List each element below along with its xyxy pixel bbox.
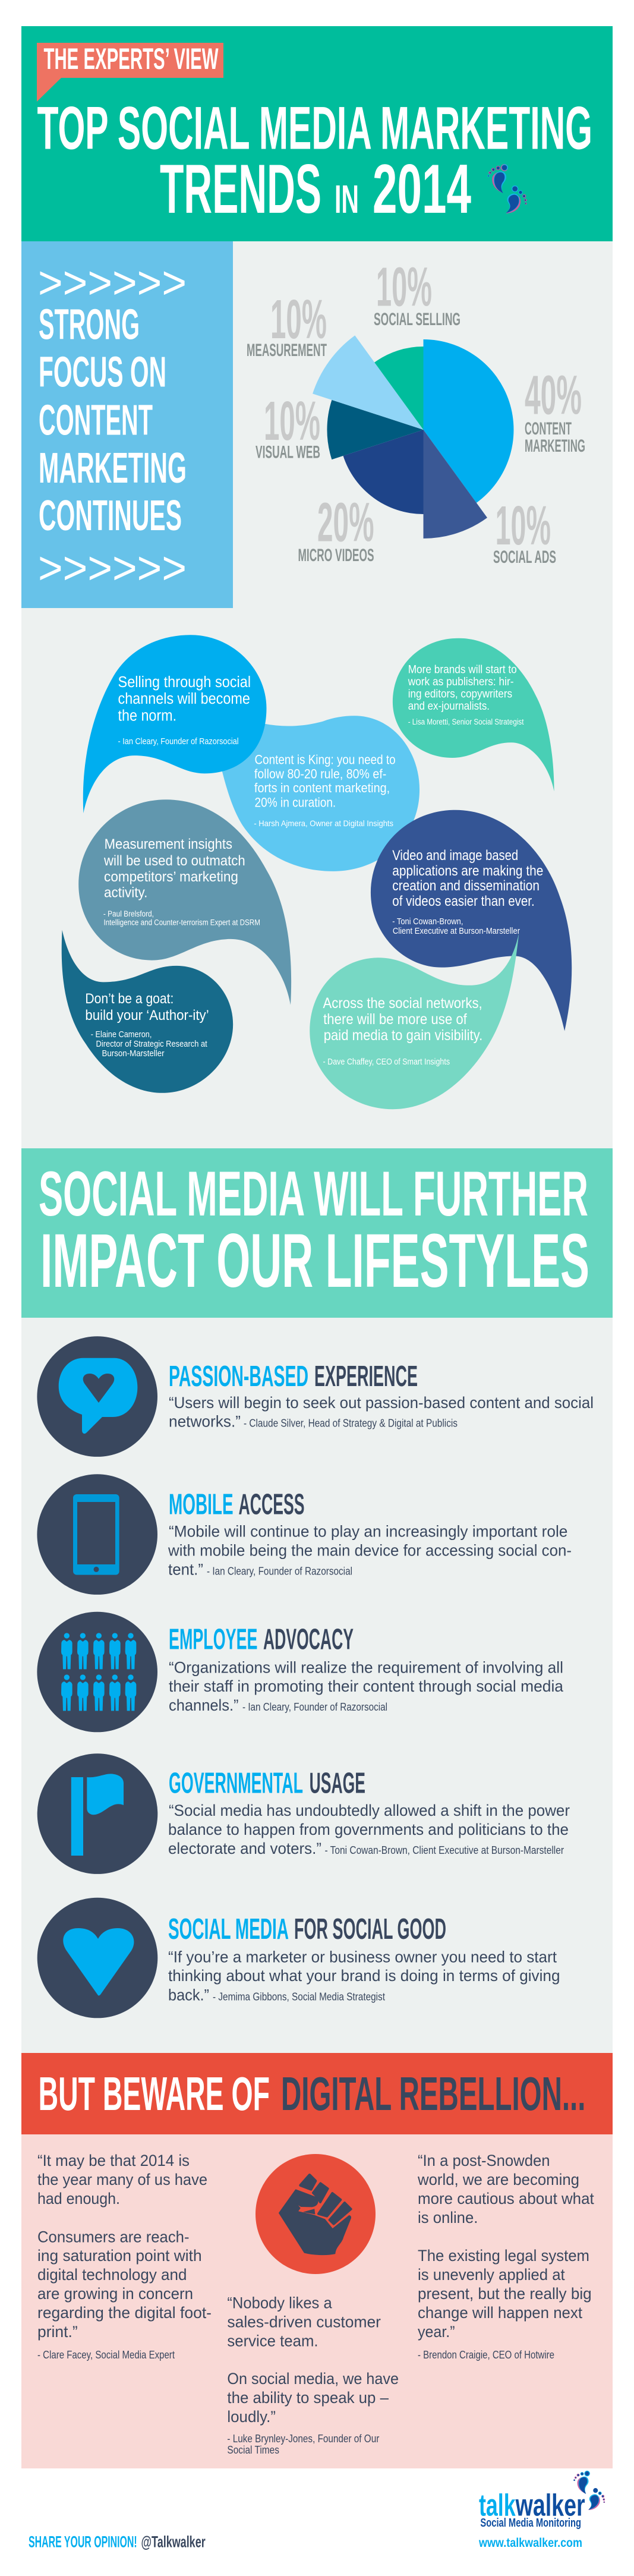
bubble: content is king: Content is King: you need to bbox=[255, 752, 396, 767]
bubble: selling through social: - Ian Cleary, Founder of Razorsocial bbox=[118, 736, 239, 747]
item: employee advocacy: EMPLOYEE bbox=[169, 1624, 258, 1656]
chart labels: SOCIAL ADS bbox=[493, 547, 556, 567]
bubble: video and image: of videos easier than ever. bbox=[392, 894, 535, 909]
chart labels: VISUAL WEB bbox=[256, 443, 320, 462]
bubble: selling through social: the norm. bbox=[118, 706, 176, 724]
icon: speech bubble heart bbox=[37, 1336, 157, 1457]
quote: clare facey: regarding the digital foot- bbox=[37, 2304, 212, 2322]
bubble: more brands: ing editors, copywriters bbox=[408, 688, 512, 700]
pie chart bbox=[313, 335, 513, 538]
quote: clare facey: Consumers are reach- bbox=[37, 2228, 189, 2246]
item: passion-based experience: EXPERIENCE bbox=[314, 1361, 418, 1393]
title bbox=[37, 95, 592, 228]
chart labels bbox=[247, 256, 585, 567]
panel: strong focus on content marketing: CONTENT bbox=[39, 397, 153, 445]
item: employee advocacy: “Organizations will realize the requirement of involving all bbox=[169, 1658, 563, 1676]
bubble: measurement insights: will be used to outmatch bbox=[103, 853, 245, 869]
quote: brendon craigie: - Brendon Craigie, CEO of Hotwire bbox=[418, 2349, 554, 2361]
panel: digital rebellion heading: BUT BEWARE OF bbox=[39, 2067, 270, 2120]
quote: clare facey: had enough. bbox=[37, 2190, 120, 2207]
title: 2014 bbox=[373, 150, 471, 228]
quote: clare facey: the year many of us have bbox=[37, 2171, 207, 2188]
quote: clare facey: - Clare Facey, Social Media Expert bbox=[37, 2349, 175, 2361]
bubble: more brands bbox=[393, 638, 554, 791]
bubble: don't be a goat: Don’t be a goat: bbox=[85, 991, 174, 1007]
chart labels: 40% bbox=[525, 364, 582, 426]
item: passion-based experience: PASSION-BASED bbox=[169, 1361, 308, 1393]
quote: luke brynley-jones: Social Times bbox=[227, 2444, 279, 2456]
bubble: content is king: - Harsh Ajmera, Owner at Digital Insights bbox=[254, 820, 393, 829]
item: mobile access: “Mobile will continue to play an increasingly important role bbox=[169, 1522, 567, 1540]
quote: luke brynley-jones: sales-driven customer bbox=[227, 2313, 381, 2331]
item: governmental usage: “Social media has undoubtedly allowed a shift in the power bbox=[169, 1802, 570, 1819]
bubble: measurement insights bbox=[78, 799, 291, 1005]
bubble: video and image bbox=[371, 810, 572, 1031]
quote: clare facey: ing saturation point with bbox=[37, 2247, 202, 2265]
panel: digital rebellion heading bbox=[21, 2053, 613, 2134]
bubble: more brands: More brands will start to bbox=[408, 663, 517, 676]
bubble: don't be a goat bbox=[62, 930, 233, 1093]
item: social media for social good: FOR SOCIAL GOOD bbox=[294, 1913, 446, 1945]
chart labels: 10% bbox=[376, 256, 432, 318]
bubble: content is king bbox=[222, 716, 419, 871]
chart labels: SOCIAL SELLING bbox=[374, 310, 460, 329]
quote: brendon craigie: present, but the really big bbox=[418, 2285, 592, 2303]
item: mobile access bbox=[37, 1474, 572, 1595]
item: social media for social good: - Jemima Gibbons, Social Media Strategist bbox=[213, 1991, 385, 2003]
quote: luke brynley-jones: On social media, we have bbox=[227, 2370, 399, 2388]
quote: clare facey bbox=[37, 2152, 212, 2361]
tag: the experts' view bbox=[37, 42, 223, 102]
chart labels: 10% bbox=[496, 495, 551, 556]
bubble: selling through social: Selling through social bbox=[118, 673, 251, 691]
title: TRENDS bbox=[160, 150, 321, 228]
bubble: measurement insights: Measurement insights bbox=[105, 836, 232, 852]
item: social media for social good: SOCIAL MEDIA bbox=[168, 1913, 289, 1945]
chart labels: MICRO VIDEOS bbox=[298, 546, 374, 565]
quote: luke brynley-jones: loudly.” bbox=[227, 2408, 276, 2426]
quote: brendon craigie: “In a post-Snowden bbox=[418, 2152, 550, 2169]
tag: the experts' view: THE EXPERTS’ VIEW bbox=[44, 42, 219, 75]
quote: luke brynley-jones: - Luke Brynley-Jones, Founder of Our bbox=[227, 2433, 379, 2445]
panel: strong focus on content marketing: STRONG bbox=[39, 301, 140, 348]
chart labels: MEASUREMENT bbox=[247, 341, 327, 360]
bubble: don't be a goat: Director of Strategic Research at bbox=[96, 1039, 207, 1049]
chart labels: MARKETING bbox=[525, 436, 585, 456]
chart labels: CONTENT bbox=[525, 419, 572, 439]
item: mobile access: - Ian Cleary, Founder of Razorsocial bbox=[207, 1566, 352, 1577]
bubble: content is king: forts in content marketing, bbox=[254, 780, 390, 795]
quote: brendon craigie: more cautious about what bbox=[418, 2190, 594, 2207]
bubble: content is king: 20% in curation. bbox=[255, 795, 336, 810]
panel: header bbox=[21, 26, 613, 241]
bubble: across the social networks: Across the social networks, bbox=[323, 996, 482, 1012]
quote: brendon craigie: year.” bbox=[418, 2323, 455, 2341]
bubble: don't be a goat: Burson-Marsteller bbox=[102, 1048, 165, 1059]
item: passion-based experience: networks.” bbox=[169, 1413, 241, 1431]
bubble: across the social networks: paid media to gain visibility. bbox=[324, 1028, 482, 1044]
quote: luke brynley-jones: “Nobody likes a bbox=[227, 2294, 333, 2312]
panel: strong focus on content marketing: >>>>>> bbox=[38, 256, 187, 308]
panel: gray background bbox=[21, 241, 613, 2053]
item: governmental usage: GOVERNMENTAL bbox=[169, 1767, 303, 1799]
item: employee advocacy: - Ian Cleary, Founder of Razorsocial bbox=[242, 1701, 387, 1713]
logo: talkwalker bbox=[478, 2471, 605, 2550]
panel: strong focus on content marketing: >>>>>> bbox=[38, 541, 187, 594]
quote: brendon craigie: world, we are becoming bbox=[417, 2171, 579, 2188]
quote: luke brynley-jones: the ability to speak up – bbox=[227, 2389, 389, 2407]
bubble: measurement insights: - Paul Brelsford, bbox=[103, 909, 154, 919]
quote: brendon craigie: The existing legal system bbox=[418, 2247, 589, 2265]
bubble: across the social networks: - Dave Chaffey, CEO of Smart Insights bbox=[323, 1057, 450, 1067]
quote: clare facey: print.” bbox=[37, 2323, 78, 2341]
logo: talkwalker: www.talkwalker.com bbox=[478, 2536, 582, 2550]
item: employee advocacy bbox=[37, 1612, 564, 1732]
item: governmental usage: USAGE bbox=[310, 1767, 365, 1799]
item: mobile access: with mobile being the main device for accessing social con- bbox=[168, 1542, 572, 1560]
bubble: measurement insights: competitors’ marketing bbox=[104, 869, 238, 885]
panel: strong focus on content marketing bbox=[21, 241, 233, 608]
item: governmental usage: balance to happen from governments and politicians to the bbox=[168, 1821, 569, 1838]
icon: group of employees bbox=[37, 1612, 157, 1732]
bubble: more brands: - Lisa Moretti, Senior Social Strategist bbox=[408, 717, 524, 727]
item: mobile access: MOBILE bbox=[169, 1489, 234, 1521]
quote: clare facey: digital technology and bbox=[37, 2266, 187, 2284]
item: mobile access: tent.” bbox=[168, 1561, 203, 1579]
item: social media for social good bbox=[37, 1898, 560, 2018]
panel: lifestyles heading bbox=[21, 1148, 613, 1318]
chart labels: 10% bbox=[270, 288, 327, 350]
quote: brendon craigie bbox=[417, 2152, 594, 2361]
footer: share your opinion: SHARE YOUR OPINION! bbox=[29, 2533, 137, 2551]
quote: clare facey: “It may be that 2014 is bbox=[37, 2152, 190, 2169]
footer: share your opinion: @Talkwalker bbox=[141, 2533, 206, 2551]
panel: strong focus on content marketing: MARKETING bbox=[39, 445, 187, 492]
item: employee advocacy: ADVOCACY bbox=[263, 1624, 354, 1656]
chart labels: 20% bbox=[317, 492, 374, 553]
chart labels: 10% bbox=[264, 390, 320, 452]
bubble: measurement insights: Intelligence and Counter-terrorism Expert at DSRM bbox=[103, 918, 260, 927]
bubble: content is king: follow 80-20 rule, 80% ef- bbox=[254, 766, 386, 781]
bubble: more brands: and ex-journalists. bbox=[408, 700, 490, 713]
item: employee advocacy: channels.” bbox=[169, 1696, 239, 1714]
title: IN bbox=[335, 177, 359, 222]
item: passion-based experience bbox=[37, 1336, 594, 1457]
item: mobile access: ACCESS bbox=[239, 1489, 304, 1521]
quote: brendon craigie: is online. bbox=[418, 2209, 478, 2227]
bubble: video and image: - Toni Cowan-Brown, bbox=[392, 917, 463, 927]
bubble: don't be a goat: build your ‘Author-ity’ bbox=[85, 1007, 209, 1024]
bubble: video and image: creation and dissemination bbox=[392, 878, 540, 894]
bubble: selling through social: channels will become bbox=[118, 689, 250, 707]
item: social media for social good: back.” bbox=[168, 1986, 209, 2004]
panel: rebellion quotes bbox=[21, 2134, 613, 2468]
bubble: video and image: applications are making the bbox=[392, 864, 543, 879]
quote: clare facey: are growing in concern bbox=[37, 2285, 193, 2303]
bubble: across the social networks bbox=[310, 933, 519, 1109]
panel: strong focus on content marketing: FOCUS ON bbox=[39, 349, 166, 396]
icon: raised fist bbox=[256, 2154, 376, 2274]
panel: strong focus on content marketing: CONTINUES bbox=[39, 492, 182, 540]
icon: smartphone bbox=[37, 1474, 157, 1595]
quote: brendon craigie: is unevenly applied at bbox=[418, 2266, 565, 2284]
quote: luke brynley-jones: service team. bbox=[227, 2332, 318, 2350]
item: governmental usage: - Toni Cowan-Brown, Client Executive at Burson-Marsteller bbox=[324, 1844, 564, 1856]
panel: expert quote bubbles bbox=[62, 635, 572, 1109]
icon: flag bbox=[37, 1753, 157, 1874]
bubble: across the social networks: there will be more use of bbox=[323, 1012, 468, 1028]
bubble: don't be a goat: - Elaine Cameron, bbox=[91, 1029, 152, 1040]
bubble: more brands: work as publishers: hir- bbox=[408, 676, 513, 688]
icon: logo footprints bbox=[573, 2471, 605, 2510]
bubble: measurement insights: activity. bbox=[104, 884, 147, 901]
icon: heart bbox=[37, 1898, 157, 2018]
logo: talkwalker: talk bbox=[479, 2488, 516, 2523]
bubble: video and image: Client Executive at Burson-Marsteller bbox=[393, 927, 520, 936]
quote: brendon craigie: change will happen next bbox=[418, 2304, 582, 2322]
icon: footprints bbox=[487, 164, 527, 213]
bubble: selling through social bbox=[83, 635, 266, 813]
quote: luke brynley-jones bbox=[227, 2294, 399, 2456]
item: social media for social good: thinking about what your brand is doing in terms of giving bbox=[168, 1967, 560, 1985]
logo: talkwalker: walker bbox=[515, 2488, 585, 2523]
item: employee advocacy: their staff in promoting their content through social media bbox=[169, 1677, 564, 1695]
item: governmental usage: electorate and voters.” bbox=[168, 1840, 321, 1857]
item: social media for social good: “If you’re a marketer or business owner you need to start bbox=[168, 1948, 557, 1966]
item: passion-based experience: “Users will begin to seek out passion-based content and social bbox=[169, 1394, 594, 1412]
item: passion-based experience: - Claude Silver, Head of Strategy & Digital at Publicis bbox=[244, 1418, 458, 1429]
item: governmental usage bbox=[37, 1753, 570, 1874]
bubble: video and image: Video and image based bbox=[392, 848, 518, 864]
logo: talkwalker: Social Media Monitoring bbox=[480, 2517, 581, 2530]
